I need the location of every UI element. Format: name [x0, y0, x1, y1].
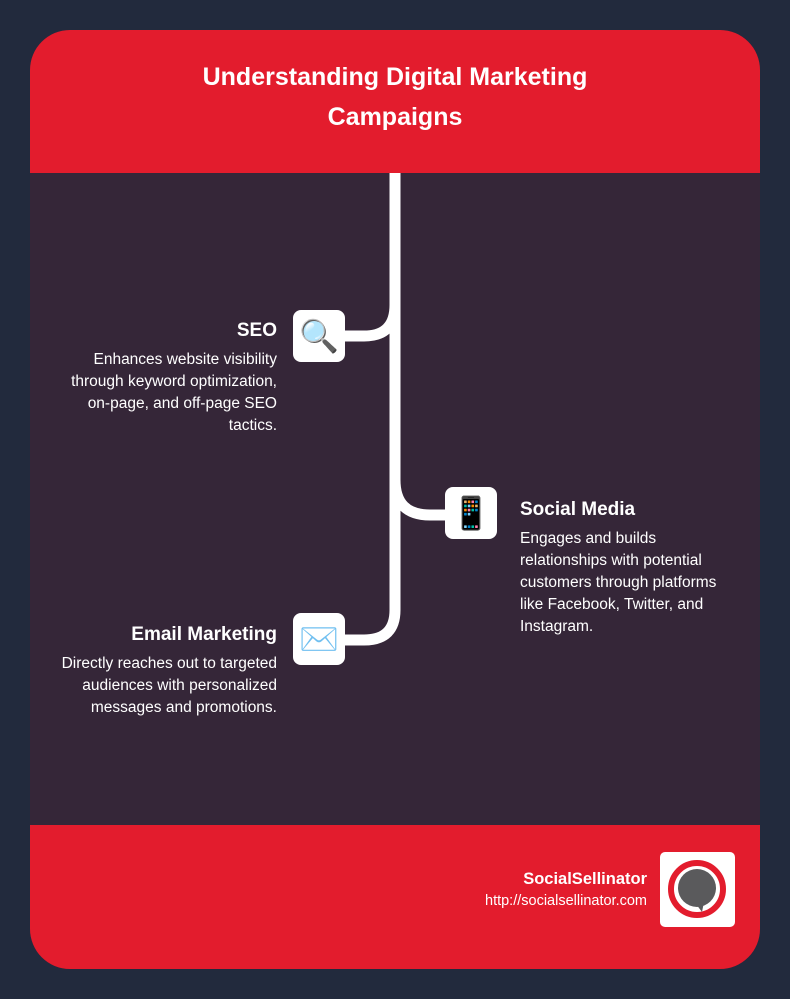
icon: envelope — [293, 613, 345, 665]
header — [30, 30, 760, 173]
text: SEO: through keyword optimization, — [71, 373, 277, 390]
brand text — [485, 870, 647, 909]
title: Understanding Digital Marketing — [203, 63, 587, 91]
text: Email Marketing: Directly reaches out to targeted — [62, 655, 277, 672]
title: Campaigns — [328, 103, 462, 131]
text: Social Media — [520, 499, 716, 635]
text: SEO: on-page, and off-page SEO — [88, 395, 277, 412]
text: SEO: tactics. — [229, 417, 277, 434]
text: Email Marketing — [62, 624, 277, 716]
text: Social Media: Engages and builds — [520, 530, 656, 547]
icon: magnifier — [293, 310, 345, 362]
brand text: SocialSellinator — [523, 870, 647, 888]
text: Social Media: like Facebook, Twitter, and — [520, 596, 703, 613]
title — [203, 63, 587, 131]
text: Social Media: Social Media — [520, 499, 635, 520]
icon: magnifier: 🔍 — [299, 317, 339, 355]
text: Social Media: relationships with potential — [520, 552, 702, 569]
text: Social Media: customers through platforms — [520, 574, 716, 591]
text: Email Marketing: audiences with personalized — [82, 677, 277, 694]
text: SEO: SEO — [237, 320, 277, 341]
footer — [30, 825, 760, 969]
icon: envelope: ✉️ — [299, 620, 339, 658]
logo — [660, 852, 735, 927]
text: Email Marketing: messages and promotions. — [91, 699, 277, 716]
text: Social Media: Instagram. — [520, 618, 593, 635]
text: SEO: Enhances website visibility — [93, 351, 277, 368]
text: SEO — [71, 320, 277, 434]
brand text: http://socialsellinator.com — [485, 893, 647, 909]
icon: phone — [445, 487, 497, 539]
icon: phone: 📱 — [451, 494, 491, 532]
text: Email Marketing: Email Marketing — [131, 624, 277, 645]
